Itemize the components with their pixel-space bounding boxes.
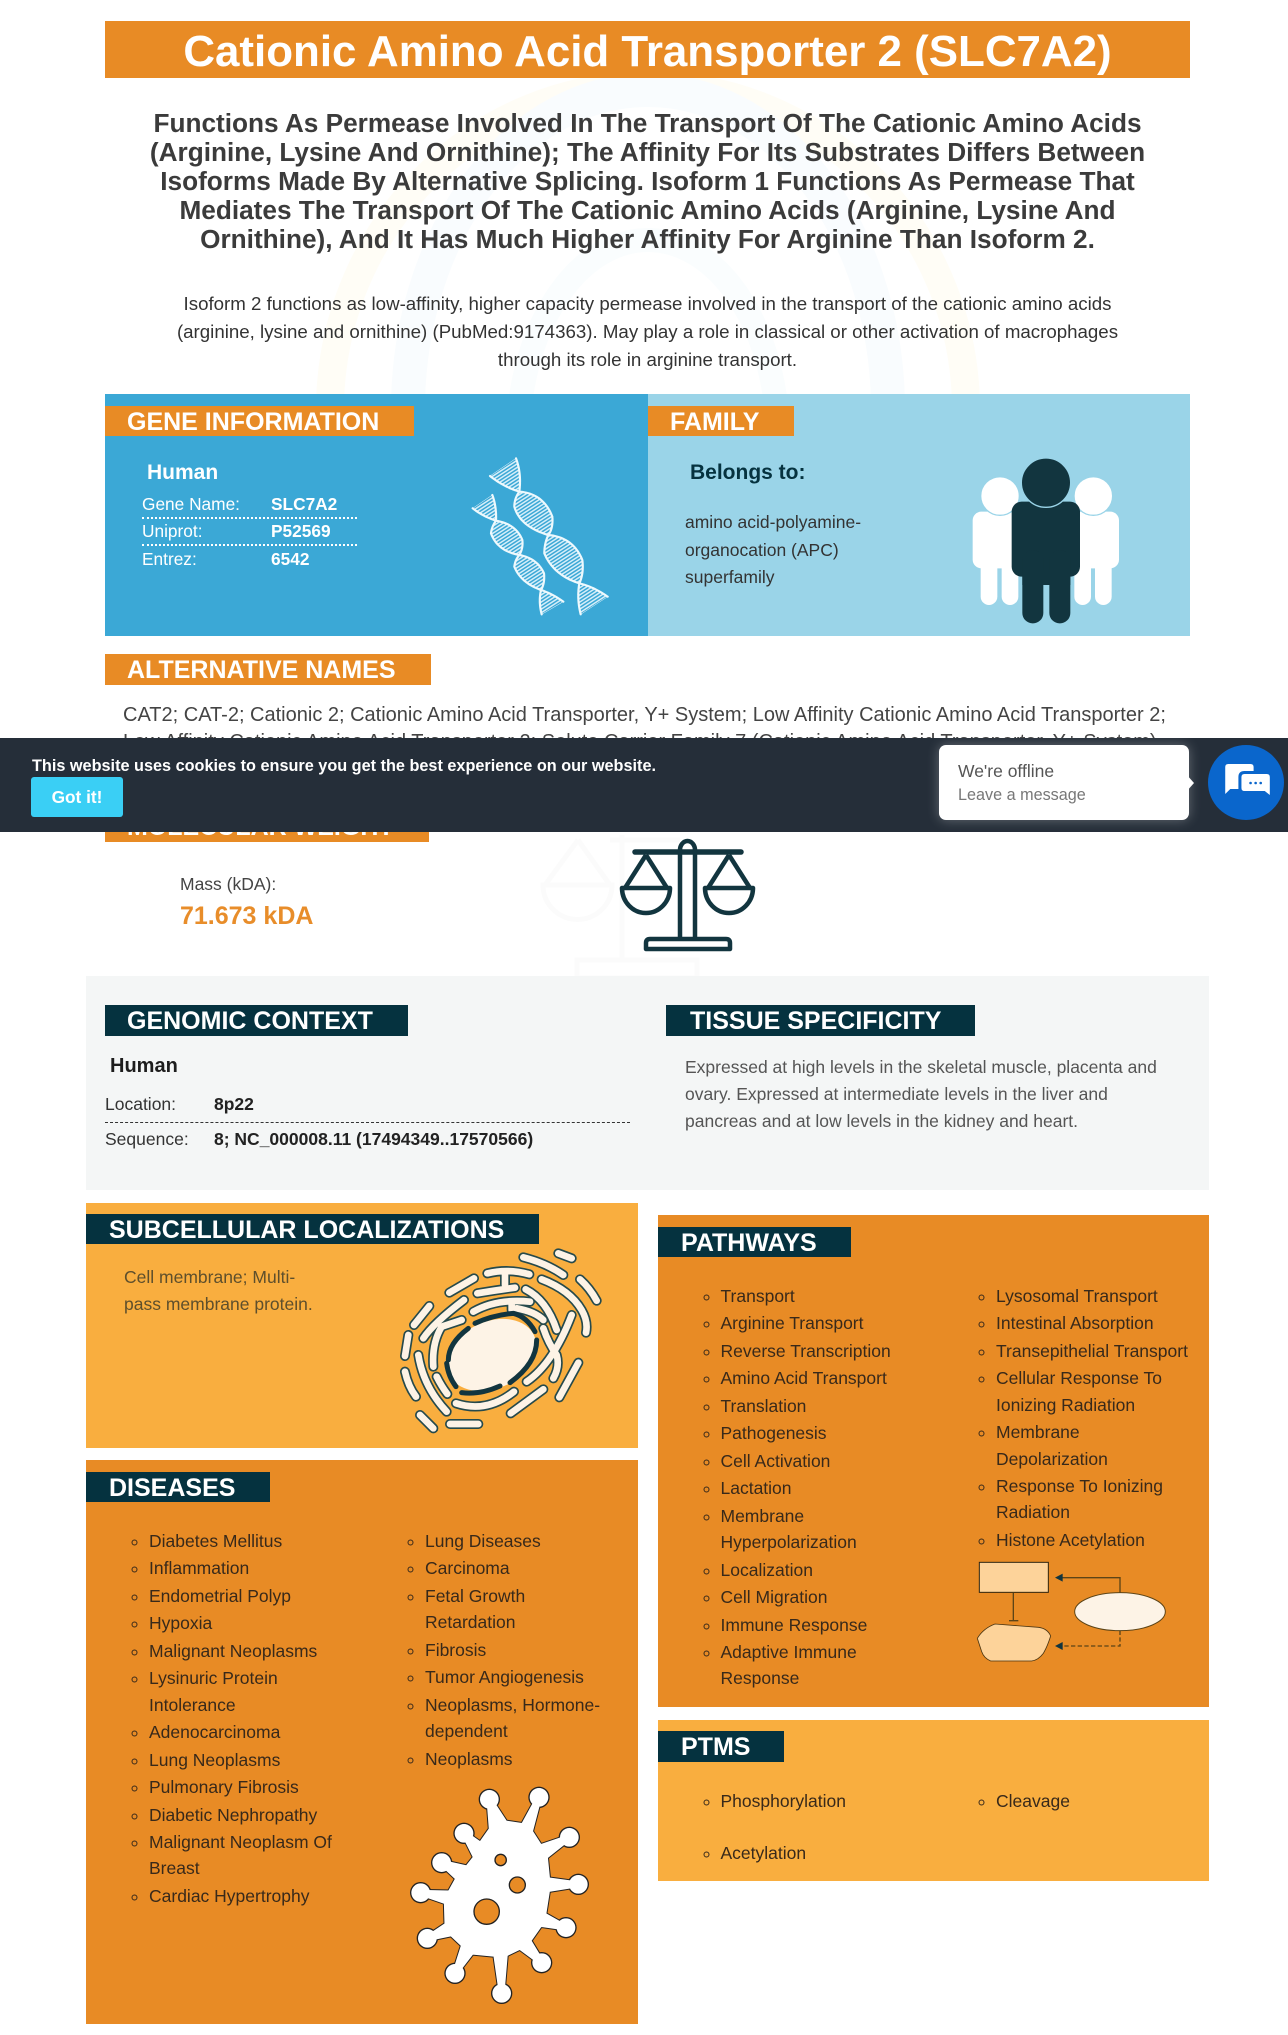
pathways list column 1: Response [720, 1668, 799, 1688]
chat arrow [1186, 774, 1194, 792]
pathways list column 1: Lactation [720, 1478, 792, 1498]
heading: genomic context: GENOMIC CONTEXT [127, 1007, 373, 1035]
diseases list column 2: Tumor Angiogenesis [425, 1667, 584, 1687]
genomic fields: Sequence: [105, 1129, 189, 1149]
watermark scale [530, 830, 730, 980]
heading: family: FAMILY [670, 408, 759, 436]
genomic fields: 8; NC_000008.11 (17494349..17570566) [214, 1129, 533, 1149]
family text: superfamily [685, 567, 774, 587]
genomic fields [105, 1094, 630, 1149]
diseases list column 1: Hypoxia [149, 1613, 212, 1633]
alternative names text [123, 704, 1166, 753]
pathways list column 1: Translation [720, 1396, 806, 1416]
cookie button [31, 777, 123, 817]
panel: family [648, 394, 1190, 636]
icon: pathway diagram [976, 1562, 1166, 1662]
pathways list column 1 [704, 1286, 891, 1688]
diseases list column 2: Retardation [425, 1612, 515, 1632]
cookie message: This website uses cookies to ensure you get the best experience on our website. [32, 757, 656, 775]
diseases list column 1: Diabetic Nephropathy [149, 1805, 317, 1825]
heading: diseases: DISEASES [109, 1474, 235, 1502]
heading: ptms: PTMS [681, 1733, 750, 1761]
icon: dna helices [472, 457, 609, 616]
gene fields: Gene Name: [142, 494, 240, 514]
pathways list column 2: Histone Acetylation [996, 1530, 1145, 1550]
heading: family [648, 406, 794, 436]
icon: virus [410, 1786, 589, 2004]
pathways list column 1: Pathogenesis [720, 1423, 827, 1443]
family text: amino acid-polyamine- [685, 512, 861, 532]
pathways list column 1: Reverse Transcription [720, 1341, 891, 1361]
pathways list column 1: Cell Migration [720, 1587, 827, 1607]
diseases list column 1: Pulmonary Fibrosis [149, 1777, 299, 1797]
heading: pathways: PATHWAYS [681, 1229, 817, 1257]
genomic fields: Location: [105, 1094, 176, 1114]
diseases list column 1 [132, 1531, 332, 1906]
subtitle [150, 108, 1145, 254]
diseases list column 1: Inflammation [149, 1558, 249, 1578]
gene fields: Entrez: [142, 549, 197, 569]
panel: ptms [658, 1720, 1209, 1880]
pathways list column 1: Cell Activation [720, 1451, 830, 1471]
heading: pathways [658, 1227, 851, 1257]
background watermark [316, 78, 980, 394]
family text: organocation (APC) [685, 540, 839, 560]
icon: endoplasmic reticulum [400, 1248, 602, 1434]
belongs to label: Belongs to: [690, 461, 806, 484]
diseases list column 1: Lung Neoplasms [149, 1750, 280, 1770]
cookie button: Got it! [52, 787, 102, 807]
species label: Human [147, 461, 218, 484]
ptms list column 1: Phosphorylation [720, 1791, 846, 1811]
diseases list column 2: Neoplasms [425, 1748, 513, 1768]
pathways list column 1: Immune Response [720, 1615, 867, 1635]
localization text: pass membrane protein. [124, 1294, 313, 1314]
pathways list column 2: Membrane [996, 1422, 1080, 1442]
tissue text: pancreas and at low levels in the kidney and heart. [685, 1111, 1078, 1131]
mass value: 71.673 kDA [180, 902, 313, 930]
localization text: Cell membrane; Multi- [124, 1267, 295, 1287]
diseases list column 1: Diabetes Mellitus [149, 1531, 282, 1551]
heading: ptms [658, 1731, 784, 1762]
intro paragraph: (arginine, lysine and ornithine) (PubMed:9174363). May play a role in classical or other activation of macrophages [177, 321, 1118, 342]
subtitle: (Arginine, Lysine And Ornithine); The Affinity For Its Substrates Differs Between [150, 137, 1145, 167]
heading: alternative names: ALTERNATIVE NAMES [127, 656, 396, 684]
heading: tissue specificity: TISSUE SPECIFICITY [690, 1007, 941, 1035]
ptms list column 1: Acetylation [720, 1843, 806, 1863]
gene fields: Uniprot: [142, 521, 203, 541]
panel: subcellular localizations [86, 1203, 638, 1448]
alternative names text: CAT2; CAT-2; Cationic 2; Cationic Amino Acid Transporter, Y+ System; Low Affinity Cationic Amino Acid Transporter 2; [123, 704, 1166, 726]
subtitle: Mediates The Transport Of The Cationic Amino Acids (Arginine, Lysine And [179, 195, 1116, 225]
intro paragraph [177, 293, 1118, 370]
icon: balance scale [620, 838, 756, 952]
gene fields [142, 494, 357, 569]
diseases list column 2: Lung Diseases [425, 1531, 541, 1551]
chat status: We're offline [958, 761, 1054, 781]
panel: genomic and tissue [86, 976, 1209, 1190]
panel: pathways [658, 1215, 1209, 1706]
gene fields: P52569 [271, 521, 331, 541]
pathways list column 1: Amino Acid Transport [720, 1368, 887, 1388]
chat prompt: Leave a message [958, 786, 1086, 804]
heading: molecular weight: MOLECULAR WEIGHT [127, 813, 394, 841]
pathways list column 2: Depolarization [996, 1449, 1108, 1469]
subtitle: Ornithine), And It Has Much Higher Affinity For Arginine Than Isoform 2. [200, 224, 1095, 254]
pathways list column 1: Arginine Transport [720, 1313, 864, 1333]
pathways list column 1: Membrane [720, 1506, 804, 1526]
species label: Human [110, 1055, 178, 1077]
gene fields: SLC7A2 [271, 494, 337, 514]
tissue text [685, 1057, 1157, 1131]
tissue text: Expressed at high levels in the skeletal muscle, placenta and [685, 1057, 1157, 1077]
diseases list column 1: Breast [149, 1858, 200, 1878]
ptms list column 1 [704, 1791, 846, 1863]
chat button [1208, 745, 1284, 820]
intro paragraph: Isoform 2 functions as low-affinity, higher capacity permease involved in the transport of the cationic amino acids [184, 293, 1111, 314]
icon: people [972, 458, 1119, 624]
mass label: Mass (kDA): [180, 874, 276, 894]
diseases list column 2: Fibrosis [425, 1640, 486, 1660]
pathways list column 2: Response To Ionizing [996, 1476, 1163, 1496]
panel: diseases [86, 1460, 638, 2024]
diseases list column 1: Endometrial Polyp [149, 1586, 291, 1606]
gene fields: 6542 [271, 549, 309, 569]
title banner: Cationic Amino Acid Transporter 2 (SLC7A2) [183, 27, 1112, 76]
pathways list column 2: Transepithelial Transport [996, 1341, 1188, 1361]
pathways list column 2: Lysosomal Transport [996, 1286, 1158, 1306]
family text [685, 512, 861, 587]
panel: gene information [105, 394, 648, 636]
diseases list column 2: Fetal Growth [425, 1586, 525, 1606]
diseases list column 1: Malignant Neoplasm Of [149, 1832, 332, 1852]
diseases list column 2: Carcinoma [425, 1558, 510, 1578]
diseases list column 1: Malignant Neoplasms [149, 1641, 317, 1661]
alternative names text: Low Affinity Cationic Amino Acid Transporter 2; Solute Carrier Family 7 (Cationic Amino Acid Transporter, Y+ System) [123, 731, 1157, 753]
diseases list column 2 [408, 1531, 600, 1768]
pathways list column 2: Cellular Response To [996, 1368, 1162, 1388]
pathways list column 1: Adaptive Immune [720, 1642, 857, 1662]
subtitle: Isoforms Made By Alternative Splicing. Isoform 1 Functions As Permease That [160, 166, 1135, 196]
pathways list column 2 [978, 1286, 1188, 1550]
pathways list column 2: Intestinal Absorption [996, 1313, 1154, 1333]
ptms list column 2: Cleavage [996, 1791, 1070, 1811]
pathways list column 2: Radiation [996, 1502, 1070, 1522]
diseases list column 2: dependent [425, 1721, 508, 1741]
pathways list column 1: Hyperpolarization [720, 1532, 857, 1552]
pathways list column 2: Ionizing Radiation [996, 1395, 1135, 1415]
localization text [124, 1267, 313, 1314]
cookie bar [0, 738, 1288, 832]
intro paragraph: through its role in arginine transport. [498, 349, 797, 370]
diseases list column 2: Neoplasms, Hormone- [425, 1695, 600, 1715]
diseases list column 1: Cardiac Hypertrophy [149, 1886, 309, 1906]
tissue text: ovary. Expressed at intermediate levels in the liver and [685, 1084, 1108, 1104]
heading: diseases [86, 1472, 270, 1502]
heading: subcellular localizations: SUBCELLULAR LOCALIZATIONS [109, 1216, 504, 1244]
chat bubble [939, 745, 1189, 820]
pathways list column 1: Transport [720, 1286, 795, 1306]
diseases list column 1: Adenocarcinoma [149, 1722, 280, 1742]
subtitle: Functions As Permease Involved In The Transport Of The Cationic Amino Acids [153, 108, 1142, 138]
diseases list column 1: Lysinuric Protein [149, 1668, 278, 1688]
heading: gene information: GENE INFORMATION [127, 408, 379, 436]
pathways list column 1: Localization [720, 1560, 813, 1580]
genomic fields: 8p22 [214, 1094, 254, 1114]
diseases list column 1: Intolerance [149, 1695, 236, 1715]
